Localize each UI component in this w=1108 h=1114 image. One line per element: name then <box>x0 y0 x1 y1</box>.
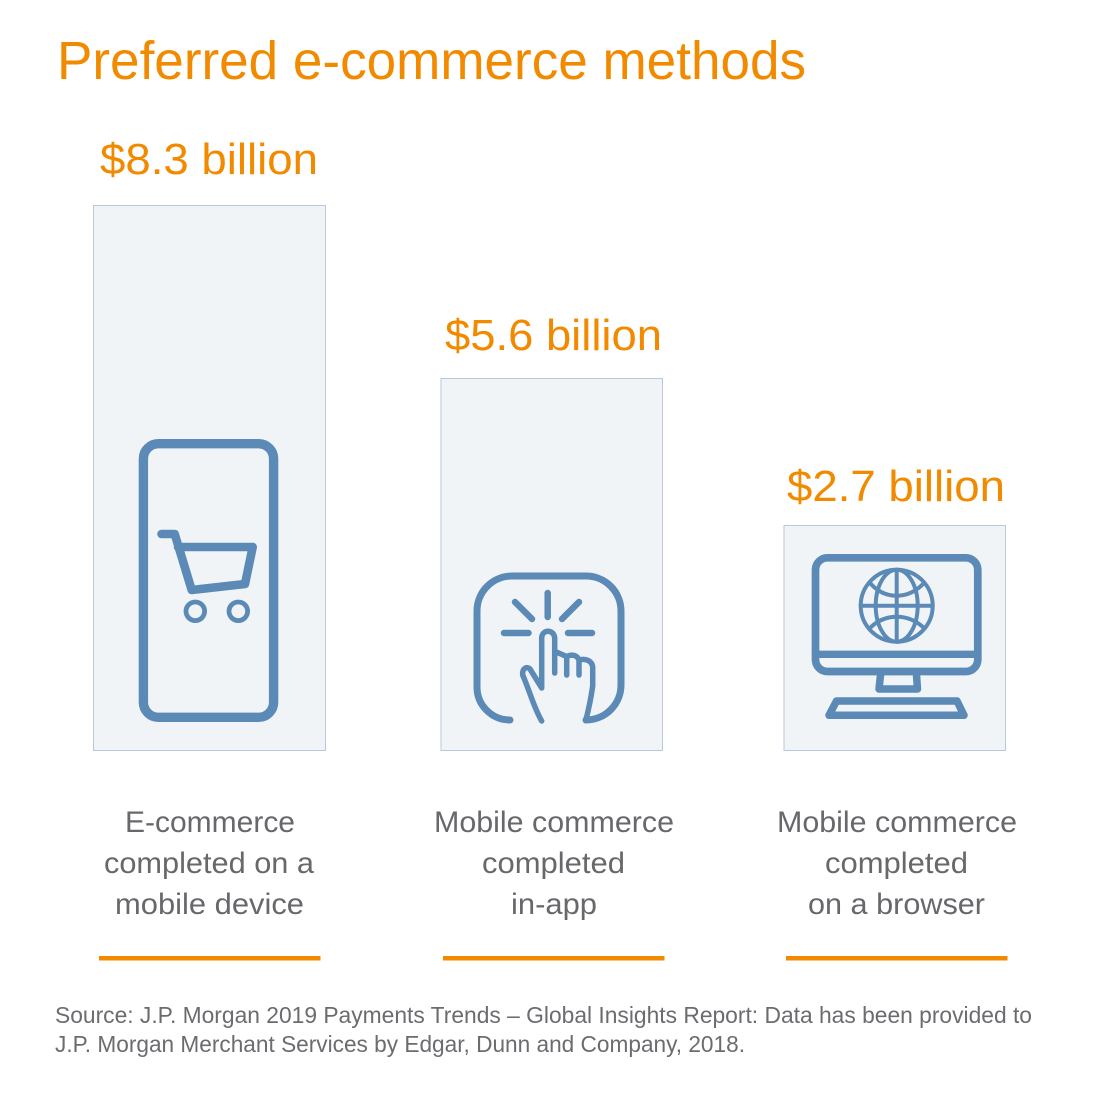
orange rule <box>443 956 664 960</box>
label: mobile commerce completed on a browser: Mobile commerce <box>777 806 1017 839</box>
label: mobile commerce completed on a browser <box>777 806 1017 921</box>
icon: phone with shopping cart <box>143 444 274 717</box>
label: mobile commerce completed in-app <box>434 806 674 921</box>
source note <box>55 1002 1032 1057</box>
bar: $8.3 billion <box>94 206 326 750</box>
source note: Source: J.P. Morgan 2019 Payments Trends – Global Insights Report: Data has been provided to <box>55 1002 1032 1028</box>
icon: desktop monitor with globe <box>816 558 978 715</box>
label: mobile commerce completed in-app: in-app <box>511 888 597 921</box>
label: mobile commerce completed on a browser: completed <box>825 847 968 880</box>
column: mobile commerce on a browser <box>777 462 1017 960</box>
value: $5.6 billion: $5.6 billion <box>445 311 662 360</box>
title: Preferred e-commerce methods <box>57 31 806 91</box>
label: e-commerce on a mobile device: mobile device <box>115 888 304 921</box>
label: e-commerce on a mobile device: completed on a <box>104 847 314 880</box>
value: $2.7 billion: $2.7 billion <box>787 462 1005 511</box>
label: e-commerce on a mobile device: E-commerce <box>125 806 295 839</box>
value: $8.3 billion: $8.3 billion <box>100 135 318 184</box>
orange rule <box>99 956 320 960</box>
icon: finger tapping button <box>477 576 621 721</box>
label: mobile commerce completed in-app: completed <box>482 847 625 880</box>
bar: $5.6 billion <box>441 378 662 750</box>
column: mobile commerce in-app <box>434 311 674 960</box>
label: mobile commerce completed in-app: Mobile commerce <box>434 806 674 839</box>
source note: J.P. Morgan Merchant Services by Edgar, Dunn and Company, 2018. <box>55 1031 745 1057</box>
column: e-commerce on a mobile device <box>94 135 326 960</box>
label: e-commerce on a mobile device <box>104 806 314 921</box>
label: mobile commerce completed on a browser: on a browser <box>808 888 985 921</box>
orange rule <box>786 956 1008 960</box>
bar: $2.7 billion <box>784 526 1006 750</box>
